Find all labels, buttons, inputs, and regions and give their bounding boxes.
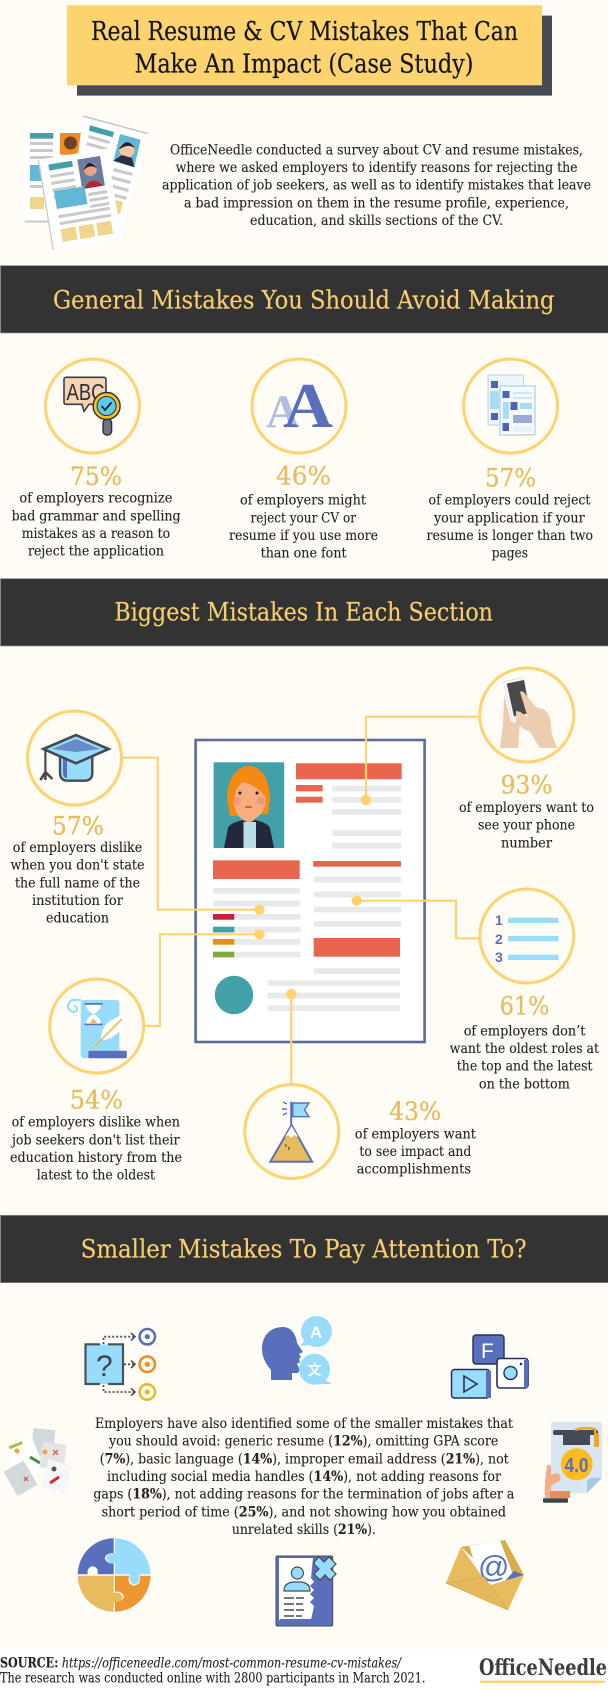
text: history: of employers dislike when bbox=[12, 1115, 180, 1131]
icon: flag on mountain bbox=[270, 1102, 312, 1162]
icon: scroll with hourglass and quill bbox=[68, 1000, 127, 1058]
text: fonts: resume if you use more bbox=[229, 528, 378, 544]
text: smaller mistakes paragraph: you should avoid: generic resume (12%), omitting GPA score bbox=[108, 1434, 498, 1450]
text: smaller mistakes paragraph bbox=[93, 1416, 514, 1538]
icon: ABC magnifier: ABC bbox=[66, 379, 104, 405]
icon: two pages bbox=[488, 375, 535, 435]
icon: ABC magnifier bbox=[64, 377, 120, 435]
title: Make An Impact (Case Study) bbox=[134, 49, 474, 79]
text: phone bbox=[459, 800, 594, 851]
panel: institution name bbox=[10, 711, 144, 927]
stat 61%: 61% bbox=[500, 991, 549, 1020]
text: length: resume is longer than two bbox=[426, 528, 593, 544]
text: institution: education bbox=[46, 911, 109, 927]
connector: education history bbox=[144, 929, 265, 1026]
section heading: general mistakes bbox=[0, 265, 608, 333]
source text: SOURCE: https://officeneedle.com/most-common-resume-cv-mistakes/ bbox=[0, 1655, 402, 1671]
icon: two letter A: A bbox=[283, 370, 333, 441]
icon: graduation cap bbox=[40, 735, 109, 781]
text: smaller mistakes paragraph: gaps (18%), not adding reasons for the termination of jobs after a bbox=[93, 1487, 514, 1503]
icon: stack of resumes bbox=[23, 115, 148, 250]
connector: phone bbox=[361, 717, 480, 805]
intro text bbox=[162, 142, 591, 229]
icon: numbered list: 3 bbox=[495, 949, 503, 965]
icon: question and targets bbox=[84, 1329, 155, 1400]
title: Real Resume & CV Mistakes That Can bbox=[91, 17, 518, 47]
icon: numbered list bbox=[495, 912, 558, 965]
icon: numbered list: 1 bbox=[495, 912, 503, 928]
icon: social media tiles bbox=[452, 1335, 528, 1398]
text: fonts: than one font bbox=[261, 546, 347, 562]
icon: social media tiles: F bbox=[481, 1340, 494, 1363]
text: length: pages bbox=[492, 546, 528, 562]
icon: numbered list: 2 bbox=[495, 931, 503, 947]
icon: two letter A: A bbox=[266, 386, 300, 438]
text: roles bbox=[450, 1023, 599, 1092]
source text: The research was conducted online with 2800 participants in March 2021. bbox=[0, 1670, 425, 1686]
icon: GPA 4.0 paper: 4.0 bbox=[564, 1455, 588, 1477]
photo bbox=[214, 762, 284, 848]
text: fonts: of employers might bbox=[240, 493, 366, 509]
text: grammar: mistakes as a reason to bbox=[22, 526, 170, 542]
text: phone: number bbox=[501, 835, 552, 851]
text: grammar: reject the application bbox=[28, 544, 164, 560]
text: smaller mistakes paragraph: Employers have also identified some of the smaller mistakes that bbox=[95, 1416, 513, 1432]
stat 57%: 57% bbox=[52, 811, 104, 840]
text: length: your application if your bbox=[433, 510, 585, 526]
section heading: smaller mistakes bbox=[0, 1215, 608, 1283]
stat 46%: 46% bbox=[276, 462, 331, 490]
text: institution: institution for bbox=[32, 893, 123, 909]
text: roles: of employers don’t bbox=[464, 1023, 586, 1039]
intro text: a bad impression on them in the resume profile, experience, bbox=[184, 195, 569, 211]
text: length: of employers could reject bbox=[428, 493, 591, 509]
text: institution: the full name of the bbox=[15, 875, 140, 891]
icon: question and targets: ? bbox=[96, 1350, 113, 1383]
text: fonts bbox=[229, 493, 378, 562]
panel: phone number bbox=[459, 668, 594, 851]
icon: speaking languages: 文 bbox=[308, 1360, 322, 1380]
text: roles: the top and the latest bbox=[457, 1059, 593, 1075]
text: length bbox=[426, 493, 593, 562]
text: history bbox=[10, 1115, 182, 1184]
footer bbox=[0, 1650, 608, 1691]
stat 75%: 75% bbox=[70, 462, 122, 491]
section heading: general mistakes: General Mistakes You Should Avoid Making bbox=[53, 286, 554, 315]
text: fonts: reject your CV or bbox=[250, 510, 356, 526]
text: smaller mistakes paragraph: including social media handles (14%), not adding reasons for bbox=[107, 1469, 501, 1485]
text: accomplishments: to see impact and bbox=[359, 1144, 471, 1160]
intro text: education, and skills sections of the CV. bbox=[250, 213, 503, 229]
icon: two letter A bbox=[266, 370, 333, 441]
text: phone: see your phone bbox=[478, 818, 575, 834]
icon: speaking languages bbox=[262, 1316, 332, 1385]
text: roles: on the bottom bbox=[479, 1076, 570, 1092]
stat 93%: 93% bbox=[501, 770, 553, 799]
resume illustration bbox=[196, 740, 425, 1042]
text: grammar bbox=[12, 491, 181, 560]
text: smaller mistakes paragraph: unrelated skills (21%). bbox=[232, 1522, 376, 1538]
text: accomplishments: of employers want bbox=[355, 1126, 476, 1142]
icon: envelope with at sign bbox=[446, 1540, 524, 1610]
panel: fonts bbox=[229, 359, 378, 562]
section heading: smaller mistakes: Smaller Mistakes To Pay Attention To? bbox=[81, 1235, 527, 1264]
text: institution bbox=[10, 840, 144, 927]
panel: roles order bbox=[450, 889, 599, 1092]
text: history: latest to the oldest bbox=[37, 1168, 155, 1184]
text: phone: of employers want to bbox=[459, 800, 594, 816]
text: accomplishments bbox=[355, 1126, 476, 1178]
icon: GPA 4.0 paper bbox=[543, 1421, 602, 1503]
panel: education history bbox=[10, 979, 182, 1184]
icon: puzzle bbox=[78, 1538, 150, 1612]
section heading: biggest mistakes bbox=[0, 578, 608, 646]
icon: envelope with at sign: @ bbox=[478, 1549, 509, 1584]
panel: accomplishments bbox=[245, 1084, 476, 1178]
text: accomplishments: accomplishments bbox=[357, 1162, 471, 1178]
icon: scattered resumes bbox=[4, 1428, 72, 1496]
icon: hand holding phone bbox=[500, 677, 557, 748]
text: smaller mistakes paragraph: short period of time (25%), and not showing how you obtained bbox=[102, 1504, 506, 1520]
text: institution: when you don't state bbox=[10, 858, 144, 874]
source text bbox=[0, 1655, 425, 1686]
connector: roles order bbox=[352, 896, 480, 938]
text: smaller mistakes paragraph: (7%), basic language (14%), improper email address (21%), not bbox=[100, 1451, 509, 1467]
icon: CV with cross bbox=[276, 1556, 336, 1626]
text: grammar: of employers recognize bbox=[19, 491, 172, 507]
panel: length bbox=[426, 359, 593, 562]
connector: accomplishments bbox=[286, 989, 296, 1084]
title bbox=[67, 5, 552, 96]
stat 54%: 54% bbox=[70, 1085, 123, 1114]
panel: grammar mistakes bbox=[12, 359, 181, 560]
stat 43%: 43% bbox=[389, 1097, 441, 1126]
text: history: education history from the bbox=[10, 1150, 182, 1166]
section heading: biggest mistakes: Biggest Mistakes In Each Section bbox=[114, 598, 493, 627]
text: history: job seekers don't list their bbox=[10, 1132, 180, 1148]
text: institution: of employers dislike bbox=[13, 840, 142, 856]
connector: education name bbox=[122, 758, 265, 915]
text: grammar: bad grammar and spelling bbox=[12, 508, 181, 524]
icon: speaking languages: A bbox=[310, 1323, 322, 1342]
stat 57%: 57% bbox=[485, 464, 536, 493]
